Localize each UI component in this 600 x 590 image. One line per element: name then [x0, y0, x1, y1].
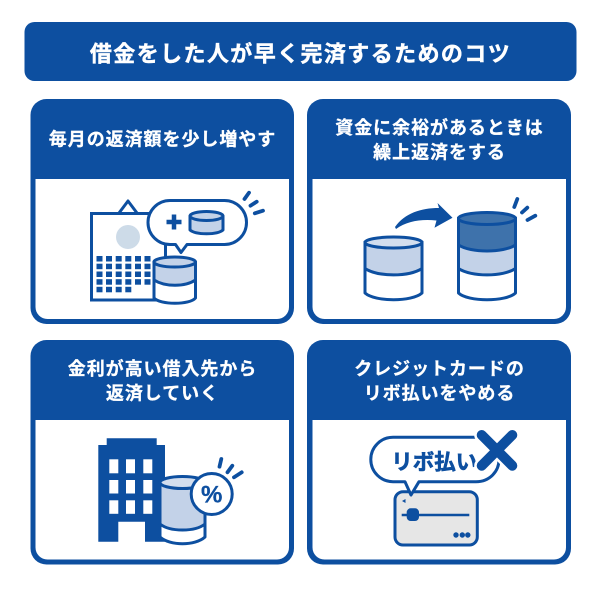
panel: pay a little more each month — [30, 99, 294, 324]
icon: small cylinder — [190, 212, 223, 234]
icon: credit card — [395, 492, 477, 545]
icon: tall stacked cylinder — [458, 212, 516, 300]
icon: small stacked cylinder — [365, 237, 422, 300]
panel 2 heading second line: 繰上返済をする — [373, 142, 506, 162]
panel 2 heading: 資金に余裕があるときは — [335, 117, 544, 138]
icon: emphasis marks — [220, 459, 242, 477]
speech bubble: plus amount — [148, 200, 247, 252]
panel 3 heading: 金利が高い借入先から — [68, 358, 257, 379]
speech bubble: revolving payment — [371, 437, 499, 495]
panel 4 heading: クレジットカードの — [354, 359, 525, 379]
panel 1 frame — [30, 99, 294, 324]
panel 4 frame — [307, 340, 571, 564]
icon: percent badge — [191, 474, 232, 514]
arrow — [395, 203, 452, 229]
panel 1 heading: 毎月の返済額を少し増やす — [49, 130, 276, 150]
panel: repay high interest lenders first — [30, 340, 294, 564]
panel 4 heading second line: リボ払いをやめる — [364, 384, 515, 404]
icon: office building — [98, 438, 165, 542]
speech bubble: revolving payment: リボ払い — [391, 450, 477, 474]
icon: stacked cylinder — [160, 476, 205, 544]
panel 3 frame — [30, 340, 294, 564]
panel: stop revolving payments — [307, 340, 571, 564]
icon: plus — [166, 214, 182, 230]
title banner: 借金をした人が早く完済するためのコツ — [90, 42, 511, 66]
icon: calendar — [92, 201, 166, 300]
icon: emphasis marks — [514, 199, 535, 220]
icon: percent badge: % — [201, 482, 222, 508]
icon: emphasis marks — [244, 193, 263, 213]
icon: cross mark — [482, 435, 512, 466]
panel 2 frame — [307, 99, 571, 324]
title banner — [24, 22, 576, 81]
panel 3 heading second line: 返済していく — [106, 384, 219, 404]
panel: make extra repayments — [307, 99, 571, 324]
icon: stacked cylinder — [154, 257, 196, 303]
